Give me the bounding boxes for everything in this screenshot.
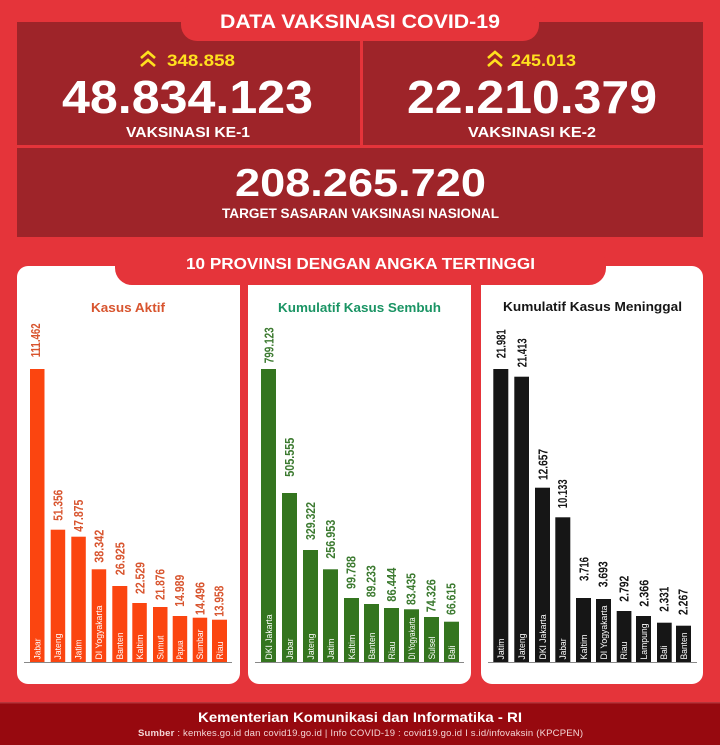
footer: Kementerian Komunikasi dan Informatika - RI <box>198 709 522 725</box>
bar chart: kasus sembuh: Kaltim <box>347 634 358 660</box>
bar chart: kasus meninggal: Bali <box>659 646 670 660</box>
footer: Sumber : kemkes.go.id dan covid19.go.id | Info COVID-19 : covid19.go.id I s.id/infovaksin (KPCPEN) <box>138 728 583 739</box>
bar chart: kasus sembuh: Banten <box>367 632 378 660</box>
title: kasus aktif: Kasus Aktif <box>91 300 166 315</box>
bar chart: kasus aktif: Sumut <box>156 635 166 660</box>
stat: target sasaran <box>222 162 499 221</box>
bar chart: kasus aktif: Banten <box>115 632 126 660</box>
bar chart: kasus aktif: Sumbar <box>195 630 206 660</box>
panel: kumulatif kasus meninggal <box>481 266 703 684</box>
stat: vaksinasi ke-1 <box>62 52 313 141</box>
stat: vaksinasi ke-1: 48.834.123 <box>62 71 313 123</box>
bar chart: kasus sembuh: Bali <box>447 646 458 660</box>
bar chart: kasus aktif: 38.342 <box>92 530 106 563</box>
bar chart: kasus meninggal: DI Yogyakarta <box>599 605 610 660</box>
bar chart: kasus aktif: 47.875 <box>72 500 86 532</box>
bar chart: kasus sembuh: Jateng <box>306 634 317 660</box>
bar chart: kasus meninggal: 3.693 <box>597 561 611 587</box>
stat: vaksinasi ke-2: VAKSINASI KE-2 <box>468 124 596 141</box>
bar chart: kasus sembuh: Jabar <box>285 638 296 660</box>
title: kumulatif kasus meninggal: Kumulatif Kasus Meninggal <box>503 299 682 314</box>
bar chart: kasus sembuh: Riau <box>387 642 398 660</box>
bar chart: kasus aktif: 26.925 <box>113 542 127 575</box>
bar chart: kasus meninggal: Jateng <box>517 634 528 660</box>
bar chart: kasus aktif: 14.496 <box>193 582 207 615</box>
bar chart: kasus sembuh: Jatim <box>326 638 337 660</box>
bar chart: kasus meninggal: Riau <box>619 642 630 660</box>
bar chart: kasus aktif: Jatim <box>74 639 84 660</box>
bar chart: kasus aktif <box>24 323 232 663</box>
stat: target sasaran: 208.265.720 <box>235 162 486 205</box>
heading pill: 10 provinsi: 10 PROVINSI DENGAN ANGKA TERTINGGI <box>186 256 535 273</box>
bar chart: kasus aktif: Papua <box>175 640 186 660</box>
bar chart: kasus sembuh: 74.326 <box>425 579 439 612</box>
bar chart: kasus meninggal: 21.413 <box>516 338 530 367</box>
bar chart: kasus meninggal <box>488 329 697 663</box>
stat: vaksinasi ke-1: VAKSINASI KE-1 <box>126 124 250 141</box>
bar chart: kasus sembuh: 89.233 <box>365 565 379 597</box>
heading pill: data vaksinasi: DATA VAKSINASI COVID-19 <box>220 11 500 33</box>
bar chart: kasus aktif: 14.989 <box>173 575 187 607</box>
bar chart: kasus aktif: 111.462 <box>29 323 43 357</box>
stat: vaksinasi ke-2 <box>407 52 657 141</box>
stat: vaksinasi ke-2: 245.013 <box>511 52 576 70</box>
bar chart: kasus sembuh: 505.555 <box>283 438 297 477</box>
panel: kasus aktif <box>17 266 240 684</box>
bar chart: kasus sembuh: 99.788 <box>344 556 358 589</box>
bar chart: kasus aktif: 21.876 <box>153 569 167 600</box>
bar chart: kasus meninggal: 2.267 <box>677 589 691 615</box>
bar chart: kasus aktif: DI Yogyakarta <box>94 605 105 660</box>
bar chart: kasus sembuh: 256.953 <box>324 520 338 559</box>
bar chart: kasus meninggal: Banten <box>679 632 690 660</box>
footer <box>0 702 720 745</box>
bar chart: kasus meninggal: Lampung <box>639 624 650 660</box>
bar chart: kasus meninggal: Jatim <box>496 638 507 660</box>
bar chart: kasus meninggal: Kaltim <box>579 634 590 660</box>
stat: target sasaran: TARGET SASARAN VAKSINASI NASIONAL <box>222 206 499 221</box>
bar chart: kasus sembuh <box>255 327 464 663</box>
title: kumulatif kasus sembuh: Kumulatif Kasus Sembuh <box>278 300 441 315</box>
stat: vaksinasi ke-2: 22.210.379 <box>407 71 657 123</box>
bar chart: kasus aktif: Kaltim <box>135 634 146 660</box>
bar chart: kasus meninggal: 12.657 <box>536 449 550 480</box>
bar chart: kasus aktif: 22.529 <box>133 562 147 594</box>
panel: vaccination data <box>17 22 703 237</box>
bar chart: kasus meninggal: Jabar <box>558 638 569 660</box>
bar chart: kasus meninggal: 3.716 <box>577 557 591 581</box>
bar chart: kasus meninggal: 10.133 <box>556 479 570 508</box>
bar chart: kasus sembuh: Sulsel <box>427 636 438 660</box>
bar chart: kasus meninggal: DKI Jakarta <box>538 614 549 660</box>
bar chart: kasus aktif: Riau <box>215 642 226 660</box>
bar chart: kasus sembuh: DKI Jakarta <box>264 614 275 660</box>
bar chart: kasus sembuh: 83.435 <box>405 573 419 605</box>
heading pill: 10 provinsi <box>115 247 606 285</box>
bar chart: kasus sembuh: 329.322 <box>304 502 318 540</box>
bar chart: kasus aktif: 13.958 <box>212 586 226 617</box>
bar chart: kasus aktif: 51.356 <box>52 490 66 521</box>
bar chart: kasus sembuh: DI Yogyakarta <box>407 617 418 660</box>
heading pill: data vaksinasi <box>181 3 539 41</box>
bar chart: kasus sembuh: 66.615 <box>445 583 459 615</box>
bar chart: kasus meninggal: 2.792 <box>617 576 631 602</box>
stat: vaksinasi ke-1: 348.858 <box>167 52 235 70</box>
bar chart: kasus aktif: Jabar <box>32 638 44 660</box>
bar chart: kasus meninggal: 2.331 <box>658 587 672 612</box>
bar chart: kasus meninggal: 2.366 <box>637 580 651 607</box>
bar chart: kasus sembuh: 799.123 <box>262 327 276 363</box>
panel: kumulatif kasus sembuh <box>248 266 471 684</box>
bar chart: kasus meninggal: 21.981 <box>495 329 509 358</box>
bar chart: kasus sembuh: 86.444 <box>385 568 399 602</box>
bar chart: kasus aktif: Jateng <box>53 634 64 660</box>
